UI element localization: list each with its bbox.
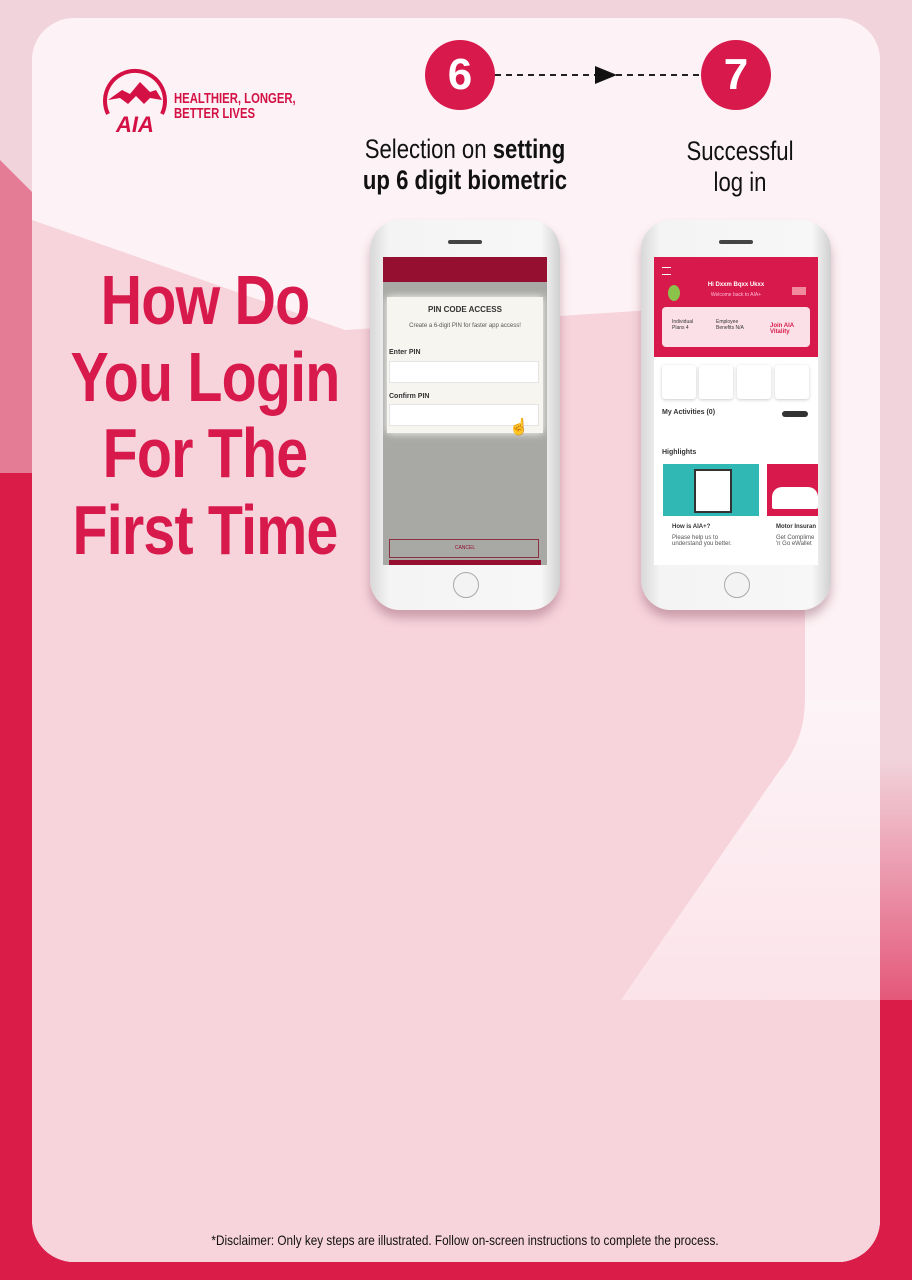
logo [103, 68, 296, 136]
caption step 7 [686, 136, 794, 197]
phone 2: app home screen: Join AIA [770, 323, 794, 329]
title: First Time [72, 490, 338, 568]
phone 1: PIN code access: PIN CODE ACCESS [428, 305, 502, 314]
phone 2: app home screen: Welcome back to AIA+ [711, 292, 761, 298]
title [71, 261, 339, 568]
step 7 badge [701, 40, 771, 110]
step 6 badge: 6 [448, 50, 472, 99]
title: How Do [101, 261, 309, 339]
phone 2: app home screen: Please help us to [672, 535, 718, 541]
phone 1: PIN code access: ☝ [509, 419, 529, 436]
phone 2: app home screen: Vitality [770, 329, 790, 335]
disclaimer: *Disclaimer: Only key steps are illustrated. Follow on-screen instructions to complete the process. [211, 1232, 719, 1248]
step 7 badge: 7 [724, 50, 748, 99]
phone 2: app home screen: 'n Go eWallet [776, 541, 812, 547]
phone 2: app home screen: understand you better. [672, 541, 732, 547]
title: You Login [71, 338, 339, 416]
title: For The [103, 414, 307, 492]
phone 1: PIN code access: Confirm PIN [389, 393, 429, 400]
phone 1: PIN code access: Enter PIN [389, 349, 421, 356]
phone 2: app home screen: How is AIA+? [672, 524, 710, 530]
phone 2: app home screen: Get Complime [776, 535, 814, 541]
phone 1: PIN code access: Create a 6-digit PIN for faster app access! [409, 323, 521, 329]
phone 2: app home screen: Hi Dxxm Bqxx Ukxx [708, 282, 764, 288]
phone 2: app home screen: My Activities (0) [662, 409, 715, 416]
logo: HEALTHIER, LONGER, [174, 91, 296, 107]
caption step 6: up 6 digit biometric [363, 165, 567, 195]
arrow connector [495, 66, 699, 84]
caption step 6 [363, 134, 567, 195]
logo: BETTER LIVES [174, 106, 255, 122]
phone 2: app home screen: Highlights [662, 449, 696, 456]
caption step 6: Selection on setting [365, 134, 565, 164]
phone 2: app home screen: Individual [672, 319, 693, 325]
caption step 7: Successful [686, 136, 794, 166]
phone 1: PIN code access: CANCEL [455, 545, 475, 551]
caption step 7: log in [714, 167, 766, 197]
phone 2: app home screen: Motor Insuran [776, 524, 816, 530]
phone 1: PIN code access [370, 220, 560, 610]
step 6 badge [425, 40, 495, 110]
phone 2: app home screen: Plans 4 [672, 325, 689, 331]
phone 2: app home screen: Employee [716, 319, 738, 325]
phone 2: app home screen: Benefits N/A [716, 325, 744, 331]
phone 2: app home screen [641, 220, 831, 610]
